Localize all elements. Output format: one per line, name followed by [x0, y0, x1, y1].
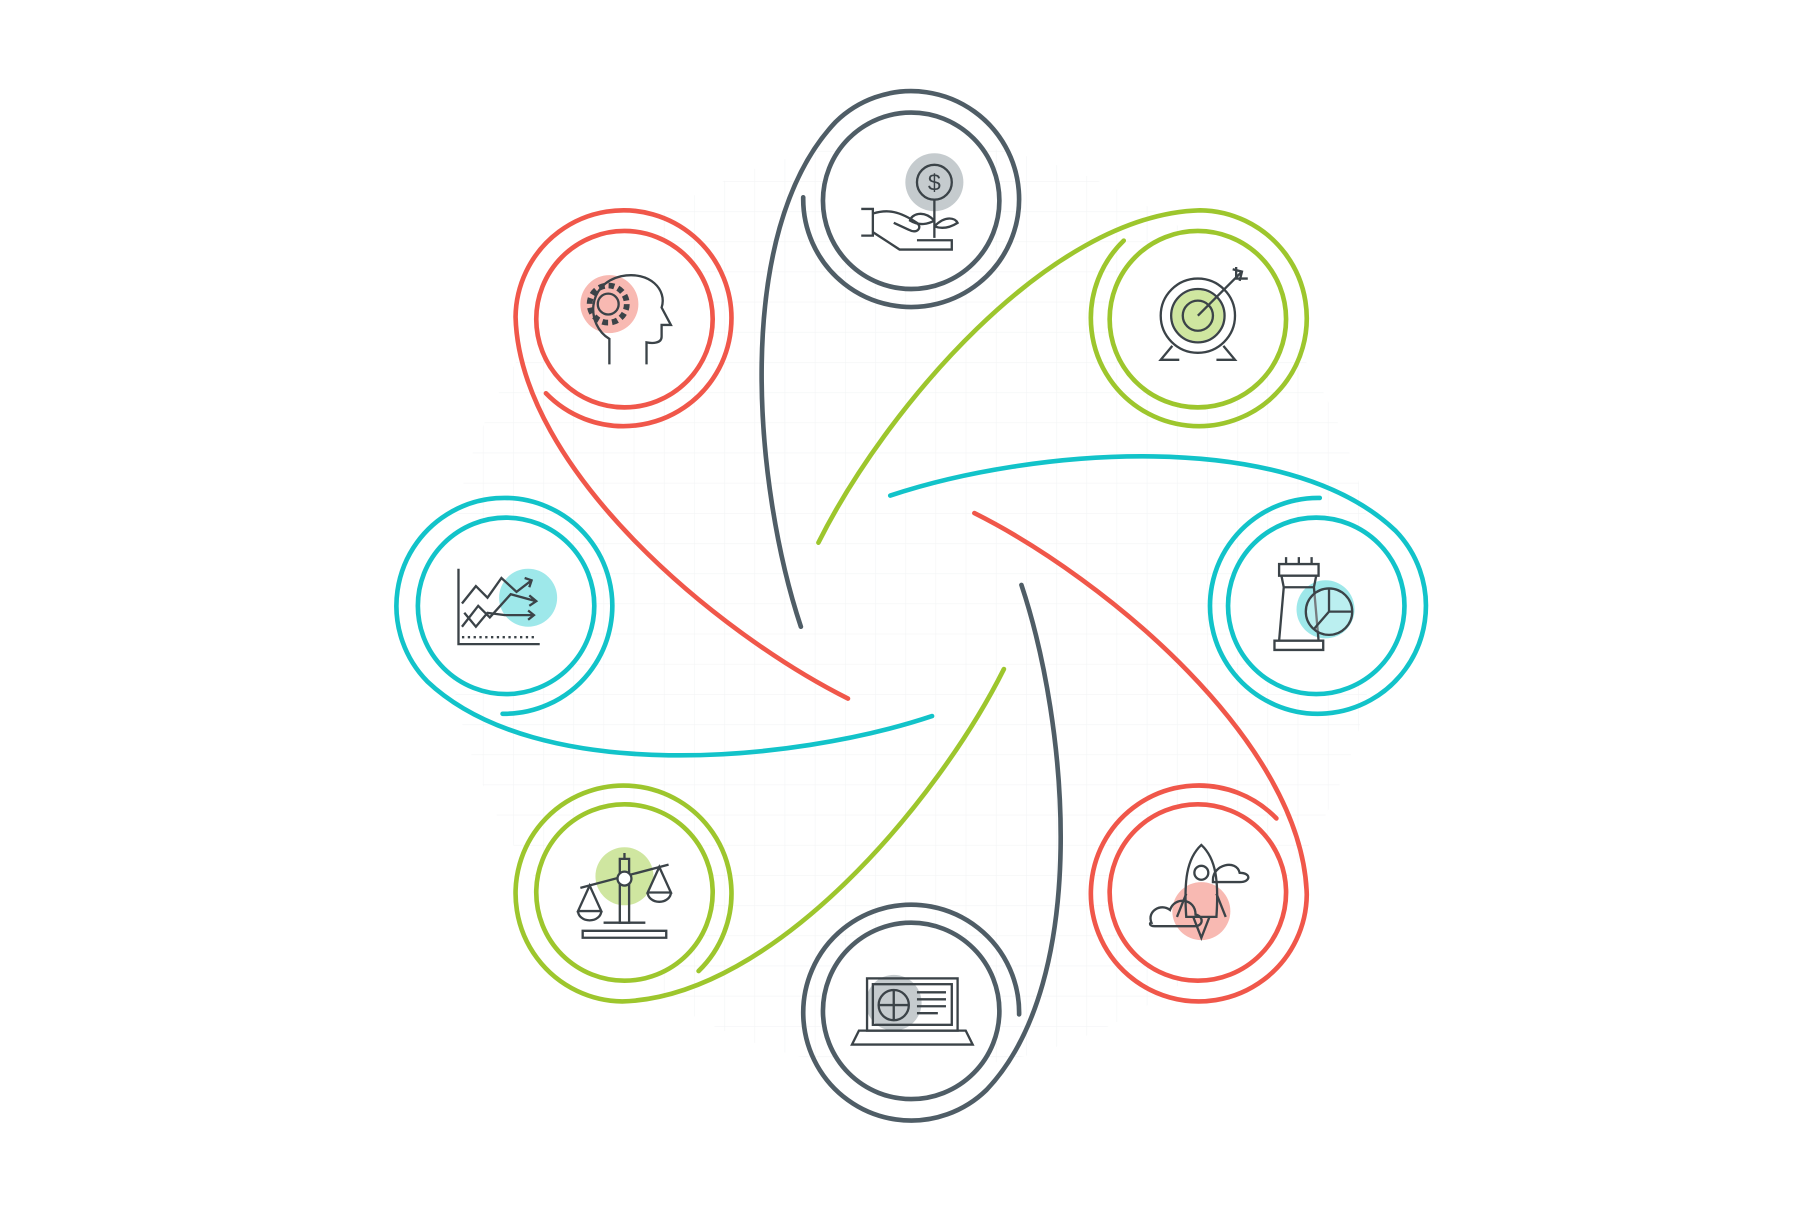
spiral loops [396, 91, 1426, 1121]
icon: money plant in hand [861, 153, 963, 250]
icon: money plant in hand: $ [928, 169, 941, 195]
icon: chess rook with pie chart [1274, 557, 1355, 650]
icon: head with gear [580, 275, 671, 364]
inner circles [418, 113, 1404, 1099]
icon: growth chart [458, 569, 557, 644]
icon: target with arrow [1161, 267, 1248, 360]
icon: laptop with chart [852, 975, 973, 1045]
icon: rocket with clouds [1150, 845, 1248, 940]
icon: balance scale [578, 847, 671, 938]
